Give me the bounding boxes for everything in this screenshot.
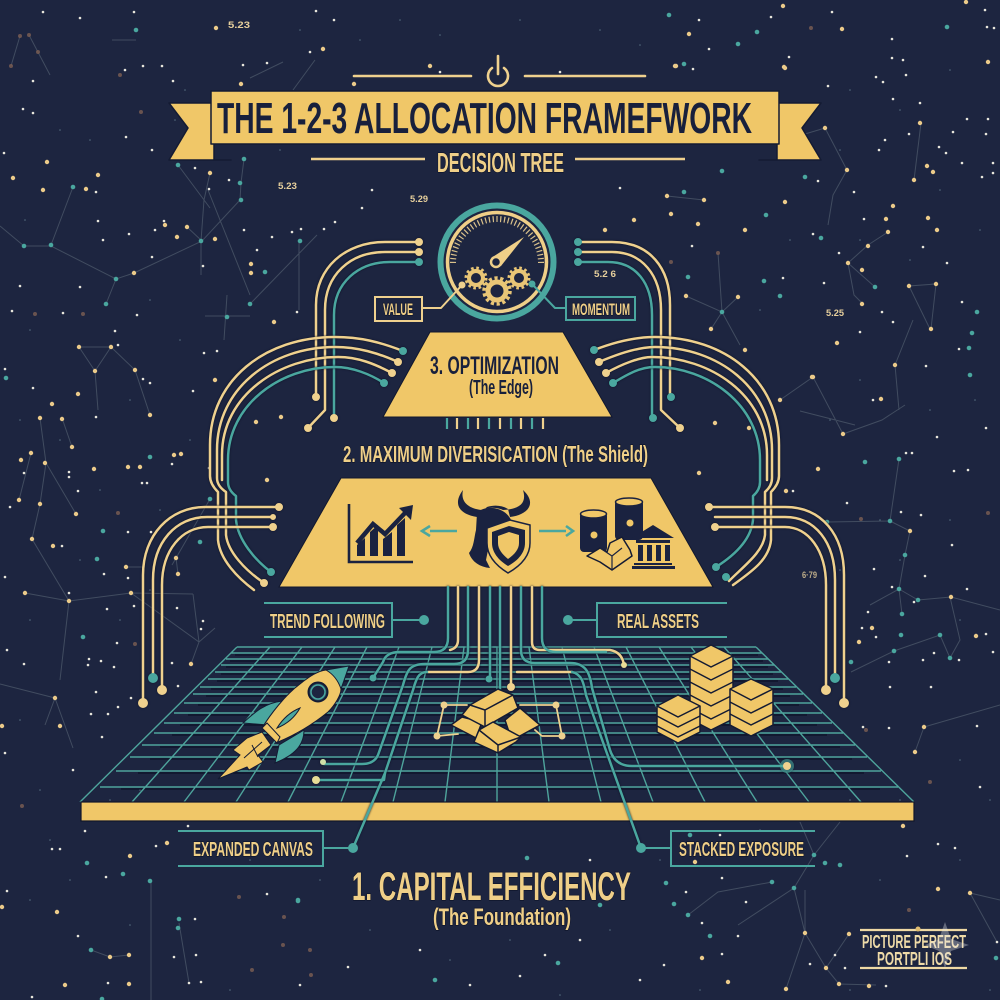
- label: stacked exposure: STACKED EXPOSURE: [679, 839, 804, 861]
- gauge ticks: [453, 219, 541, 263]
- label: real assets: [563, 603, 727, 637]
- icon: power symbol with rules: [354, 56, 645, 86]
- grid lines: [80, 647, 914, 802]
- small stray numbers: [228, 20, 844, 580]
- sparkle: [925, 922, 969, 968]
- label: value: [375, 282, 466, 321]
- watermark: PORTPLI IOS: [877, 949, 952, 969]
- trapezoid: [279, 478, 713, 587]
- arrow: right: [539, 526, 573, 536]
- icon: commodities and bank: [580, 498, 675, 570]
- title banner: [169, 91, 821, 160]
- connector ticks yellow: [457, 418, 543, 429]
- gauge needle: [491, 237, 524, 266]
- heading: 3. OPTIMIZATION: [430, 352, 559, 380]
- lower circuit arcs: [138, 503, 849, 708]
- small stray numbers: 5.2 6: [594, 269, 616, 279]
- icon: rocket: [218, 666, 349, 779]
- heading: 1 capital efficiency: 1. CAPITAL EFFICIENCY: [352, 865, 631, 909]
- small stray numbers: 5.25: [826, 308, 844, 318]
- gears: [466, 268, 529, 304]
- icon: trend chart: [349, 504, 413, 562]
- circuit wires across grid: [312, 587, 794, 848]
- label: momentum: MOMENTUM: [572, 300, 630, 319]
- middle circuit arcs: [210, 337, 779, 590]
- subheading: the foundation: (The Foundation): [433, 904, 571, 931]
- small stray numbers: 5.29: [410, 194, 428, 204]
- upper circuit arcs: [304, 238, 684, 432]
- label: expanded canvas: EXPANDED CANVAS: [193, 839, 313, 861]
- subheading: (The Edge): [469, 377, 533, 399]
- icon: coin stacks: [657, 645, 773, 743]
- gauge rings: [440, 206, 554, 318]
- grid shadows: [121, 655, 880, 789]
- label: trend following: TREND FOLLOWING: [270, 611, 385, 633]
- small stray numbers: 5.23: [278, 181, 297, 191]
- panel: 3 optimization: [383, 332, 612, 429]
- icon: gold bars: [451, 689, 540, 753]
- banner body: [211, 91, 779, 144]
- heading: 2 maximum diversification: 2. MAXIMUM DIVERISICATION (The Shield): [343, 441, 648, 467]
- gauge with gears: [440, 206, 554, 318]
- small stray numbers: 6·79: [802, 570, 817, 580]
- right stack: [730, 679, 773, 736]
- label: expanded canvas: [178, 831, 358, 866]
- left stack: [657, 695, 700, 743]
- ribbon tails: [169, 103, 231, 160]
- small stray numbers: 5.23: [228, 20, 250, 30]
- label: value: VALUE: [383, 300, 413, 319]
- label: trend following: [264, 603, 429, 637]
- watermark: [860, 922, 969, 969]
- icon: bull with shield: [458, 490, 530, 573]
- label: real assets: REAL ASSETS: [617, 611, 699, 633]
- arrow: left: [422, 526, 457, 536]
- gold connectors: [434, 702, 566, 740]
- connector ticks: [447, 418, 532, 429]
- label: stacked exposure: [636, 831, 815, 866]
- panel: 2 maximum diversification: [279, 478, 713, 587]
- tall stack: [690, 645, 733, 730]
- label: momentum: [528, 280, 635, 320]
- subtitle: decision tree: DECISION TREE: [437, 147, 564, 178]
- trapezoid: [383, 332, 612, 417]
- platform slab: [81, 802, 914, 821]
- grid platform: [80, 647, 914, 821]
